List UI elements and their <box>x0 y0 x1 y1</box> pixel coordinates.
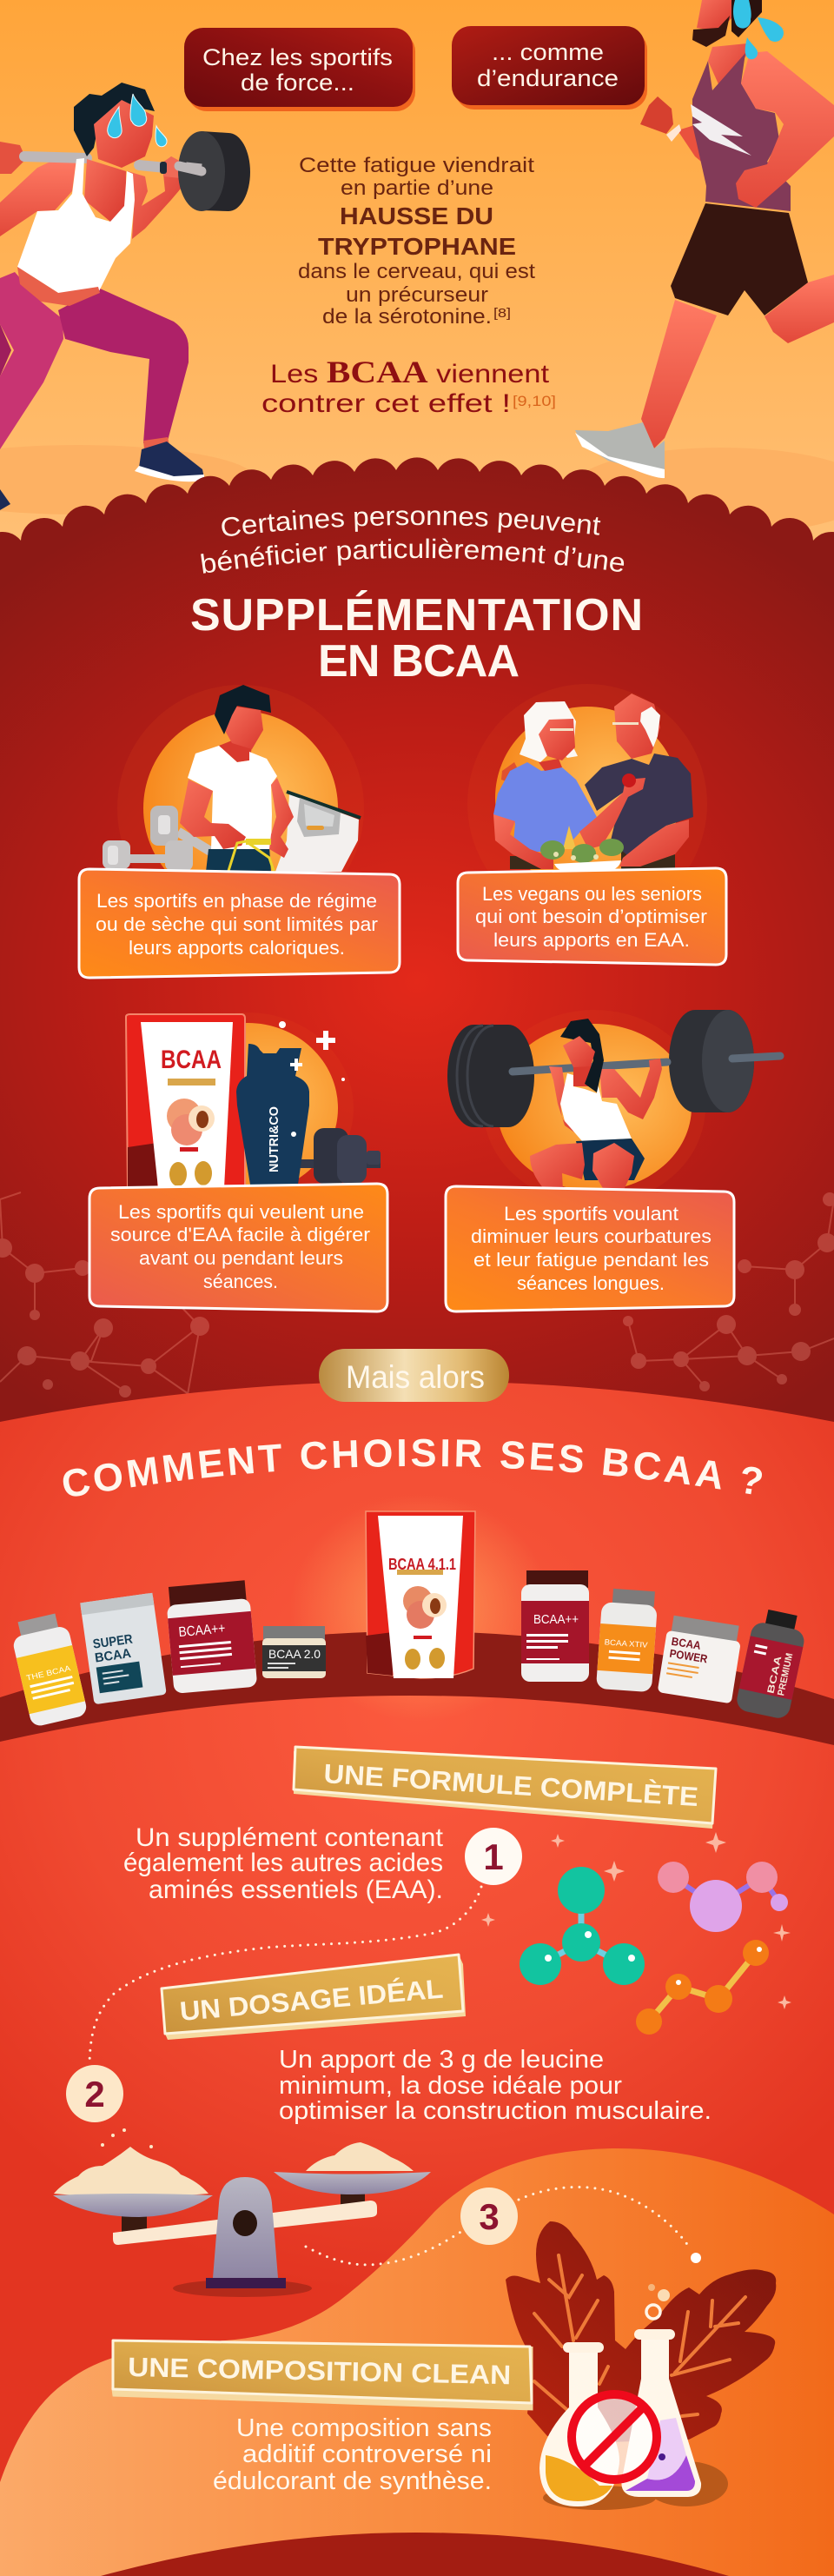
icon: almonds <box>405 1648 445 1670</box>
curved intro text: bénéficier particulièrement d’une <box>201 538 624 574</box>
button: comme d'endurance <box>452 26 647 110</box>
panel: vegans and seniors <box>458 684 726 965</box>
button: Chez les sportifs de force: de force... <box>241 70 354 96</box>
button: Chez les sportifs de force: Chez les sportifs <box>202 44 393 70</box>
card: vegans and seniors: leurs apports en EAA. <box>493 929 690 951</box>
panel: athletes on a diet <box>79 685 400 978</box>
illustration: balance scale <box>53 2128 431 2297</box>
product: BCAA xtiv orange bottle: BCAA XTIV <box>604 1637 648 1650</box>
card: dieting athletes: leurs apports caloriques. <box>129 937 345 959</box>
icon: almonds <box>169 1161 212 1186</box>
product: center BCAA 4.1.1 bag <box>366 1511 475 1678</box>
heading: supplementation en BCAA <box>190 590 643 687</box>
text block: complete formula: Un supplément contenant <box>136 1823 444 1852</box>
icon: peach <box>403 1586 447 1629</box>
button: comme d'endurance: ... comme <box>492 39 604 65</box>
number badge 2: 2 <box>84 2074 105 2115</box>
text block: tryptophane: Cette fatigue viendrait <box>299 154 534 177</box>
product: BCAA++ jar right: BCAA++ <box>533 1612 579 1627</box>
icon: orange halo <box>142 1012 354 1204</box>
icon: peach <box>167 1099 215 1145</box>
card: easy digest: Les sportifs qui veulent une <box>118 1201 364 1223</box>
text block: ideal dosage <box>279 2046 712 2125</box>
icon: sweat drops on man <box>733 0 784 59</box>
illustration: scale <box>275 792 361 872</box>
icon: orange halo <box>483 1010 705 1205</box>
icon: sparkles around molecules <box>481 1832 791 2009</box>
illustration: shaker <box>236 1044 309 1185</box>
top background <box>0 0 834 591</box>
icon: salad bowl <box>540 826 624 872</box>
panel: reduce soreness and fatigue <box>446 1010 780 1311</box>
product: the BCAA yellow bottle: THE BCAA <box>25 1663 71 1683</box>
text block: tryptophane: HAUSSE DU <box>340 202 493 229</box>
dotted connector 1 to 2 <box>89 1887 481 2063</box>
heading: comment choisir ses BCAA: COMMENT CHOISIR SES BCAA ? <box>63 1439 762 1497</box>
background molecule patterns <box>0 1192 834 1408</box>
ground shadows <box>0 445 834 534</box>
text block: complete formula: aminés essentiels (EAA). <box>149 1876 443 1904</box>
pill: Mais alors <box>319 1349 509 1402</box>
text block: clean composition: additif controversé ni <box>242 2440 492 2468</box>
illustration: senior man <box>501 694 693 869</box>
bottom dark dome <box>101 2533 729 2576</box>
product: BCAA power <box>658 1615 744 1703</box>
card: dieting athletes <box>79 869 400 978</box>
icon: green molecule <box>520 1867 645 1985</box>
pill: Mais alors: Mais alors <box>346 1359 485 1395</box>
product: BCAA++ jar left: BCAA++ <box>178 1621 226 1640</box>
icon: apple <box>622 773 636 787</box>
banner: un dosage ideal: UN DOSAGE IDÉAL <box>179 1974 444 2027</box>
illustration: BCAA bag: BCAA <box>161 1046 222 1074</box>
button: comme d'endurance: d’endurance <box>477 65 619 91</box>
blob: orange lower background <box>0 2148 834 2576</box>
text block: tryptophane: [8] <box>493 306 511 321</box>
glow behind center product <box>290 1495 551 1721</box>
text block: BCAA effect: Les BCAA viennent <box>270 355 550 389</box>
icon: orange halo <box>117 685 364 932</box>
card: dieting athletes: Les sportifs en phase de régime <box>96 890 377 912</box>
number badge 1: 1 <box>483 1836 504 1877</box>
card: easy digest: séances. <box>203 1271 278 1292</box>
text block: complete formula <box>123 1823 444 1904</box>
product: BCAA premium <box>735 1607 809 1720</box>
number badge 3: 3 <box>479 2196 500 2237</box>
number badge 3 <box>460 2188 518 2245</box>
text block: clean composition: Une composition sans <box>236 2414 492 2442</box>
product: BCAA++ jar left <box>165 1580 257 1694</box>
product: BCAA premium: BCAA <box>765 1655 784 1695</box>
banner: une composition clean <box>113 2340 532 2409</box>
text block: tryptophane: TRYPTOPHANE <box>318 233 516 260</box>
product: center BCAA 4.1.1 bag: BCAA 4.1.1 <box>388 1556 456 1573</box>
card: soreness: séances longues. <box>517 1272 665 1294</box>
product: BCAA 2.0: BCAA 2.0 <box>268 1647 321 1661</box>
product: BCAA power: POWER <box>669 1647 709 1665</box>
banner: un dosage ideal <box>162 1955 466 2040</box>
product: BCAA 2.0 <box>262 1626 326 1678</box>
text block: tryptophane: en partie d’une <box>341 176 493 200</box>
text block: BCAA effect <box>261 355 556 418</box>
text block: ideal dosage: minimum, la dose idéale pour <box>279 2072 622 2100</box>
panel: how to choose background dome <box>0 1381 834 2576</box>
card: soreness: Les sportifs voulant <box>504 1203 678 1225</box>
illustration: man with tape measure <box>180 685 294 872</box>
icon: sweat drops on woman <box>108 94 167 147</box>
card: easy digest: source d'EAA facile à digérer <box>110 1224 370 1245</box>
product row <box>9 1511 809 1728</box>
text block: complete formula: également les autres acides <box>123 1849 443 1877</box>
panel: supplementation background with scalloped edge <box>0 457 834 1477</box>
illustration: shaker: NUTRI&CO <box>267 1106 281 1172</box>
dotted connector 3 to flask <box>519 2187 689 2247</box>
curved intro text <box>201 510 624 574</box>
illustration: woman squatting with barbell <box>0 83 250 510</box>
illustration: leaves <box>506 2221 776 2442</box>
illustration: squatting woman with barbell <box>447 1010 780 1190</box>
number badge 1 <box>465 1828 522 1885</box>
icon: sparkles <box>279 1021 345 1137</box>
illustration: bubbles and dot <box>646 2253 701 2319</box>
button: Chez les sportifs de force <box>184 28 415 111</box>
dotted connector 2 to 3 <box>306 2229 465 2265</box>
product: the BCAA yellow bottle <box>9 1611 89 1728</box>
card: dieting athletes: ou de sèche qui sont limités par <box>96 913 378 935</box>
heading: supplementation en BCAA: EN BCAA <box>318 636 520 687</box>
card: soreness: diminuer leurs courbatures <box>471 1225 712 1247</box>
card: vegans and seniors <box>458 868 726 965</box>
illustration: man running <box>575 0 834 478</box>
card: vegans and seniors: Les vegans ou les seniors <box>482 883 702 905</box>
text block: ideal dosage: Un apport de 3 g de leucine <box>279 2046 604 2074</box>
illustration: BCAA bag <box>126 1014 245 1188</box>
text block: clean composition <box>213 2414 492 2495</box>
text block: tryptophane: un précurseur <box>346 283 488 307</box>
text block: tryptophane: de la sérotonine. <box>322 305 492 329</box>
product: BCAA++ jar right <box>521 1570 589 1682</box>
product: super BCAA pouch: SUPER <box>92 1631 134 1652</box>
illustration: flasks <box>539 2329 728 2510</box>
text block: BCAA effect: [9,10] <box>513 393 556 409</box>
card: easy digest: avant ou pendant leurs <box>139 1247 343 1269</box>
panel: easy to digest EAA source <box>89 1012 387 1311</box>
text block: ideal dosage: optimiser la construction musculaire. <box>279 2097 712 2125</box>
text block: tryptophane: dans le cerveau, qui est <box>298 260 535 283</box>
card: easy digest <box>89 1184 387 1311</box>
icon: orange halo <box>467 684 707 924</box>
banner: une formule complete <box>294 1747 716 1829</box>
text block: clean composition: édulcorant de synthèse. <box>213 2467 492 2495</box>
number badge 2 <box>66 2065 123 2122</box>
curved intro text: Certaines personnes peuvent <box>222 510 601 536</box>
shelf <box>0 1631 834 1745</box>
icon: pink molecule <box>658 1862 788 1932</box>
product: super BCAA pouch <box>80 1593 167 1704</box>
product: super BCAA pouch: BCAA <box>94 1646 132 1666</box>
text block: tryptophane <box>298 154 535 329</box>
illustration: dumbbells <box>103 806 211 871</box>
illustration: dumbbell <box>295 1128 381 1184</box>
card: vegans and seniors: qui ont besoin d’optimiser <box>475 906 707 927</box>
product: BCAA power: BCAA <box>671 1635 702 1652</box>
icon: forbidden sign <box>572 2394 657 2480</box>
text block: BCAA effect: contrer cet effet ! <box>261 389 511 418</box>
product: BCAA premium: PREMIUM <box>776 1652 795 1696</box>
card: soreness: et leur fatigue pendant les <box>473 1249 709 1271</box>
heading: supplementation en BCAA: SUPPLÉMENTATION <box>190 590 643 641</box>
card: soreness <box>446 1186 734 1311</box>
illustration: senior woman <box>493 701 645 869</box>
banner: une composition clean: UNE COMPOSITION CLEAN <box>128 2352 511 2390</box>
icon: orange molecule <box>636 1940 769 2035</box>
banner: une formule complete: UNE FORMULE COMPLÈTE <box>323 1758 699 1812</box>
product: BCAA xtiv orange bottle <box>596 1588 659 1692</box>
